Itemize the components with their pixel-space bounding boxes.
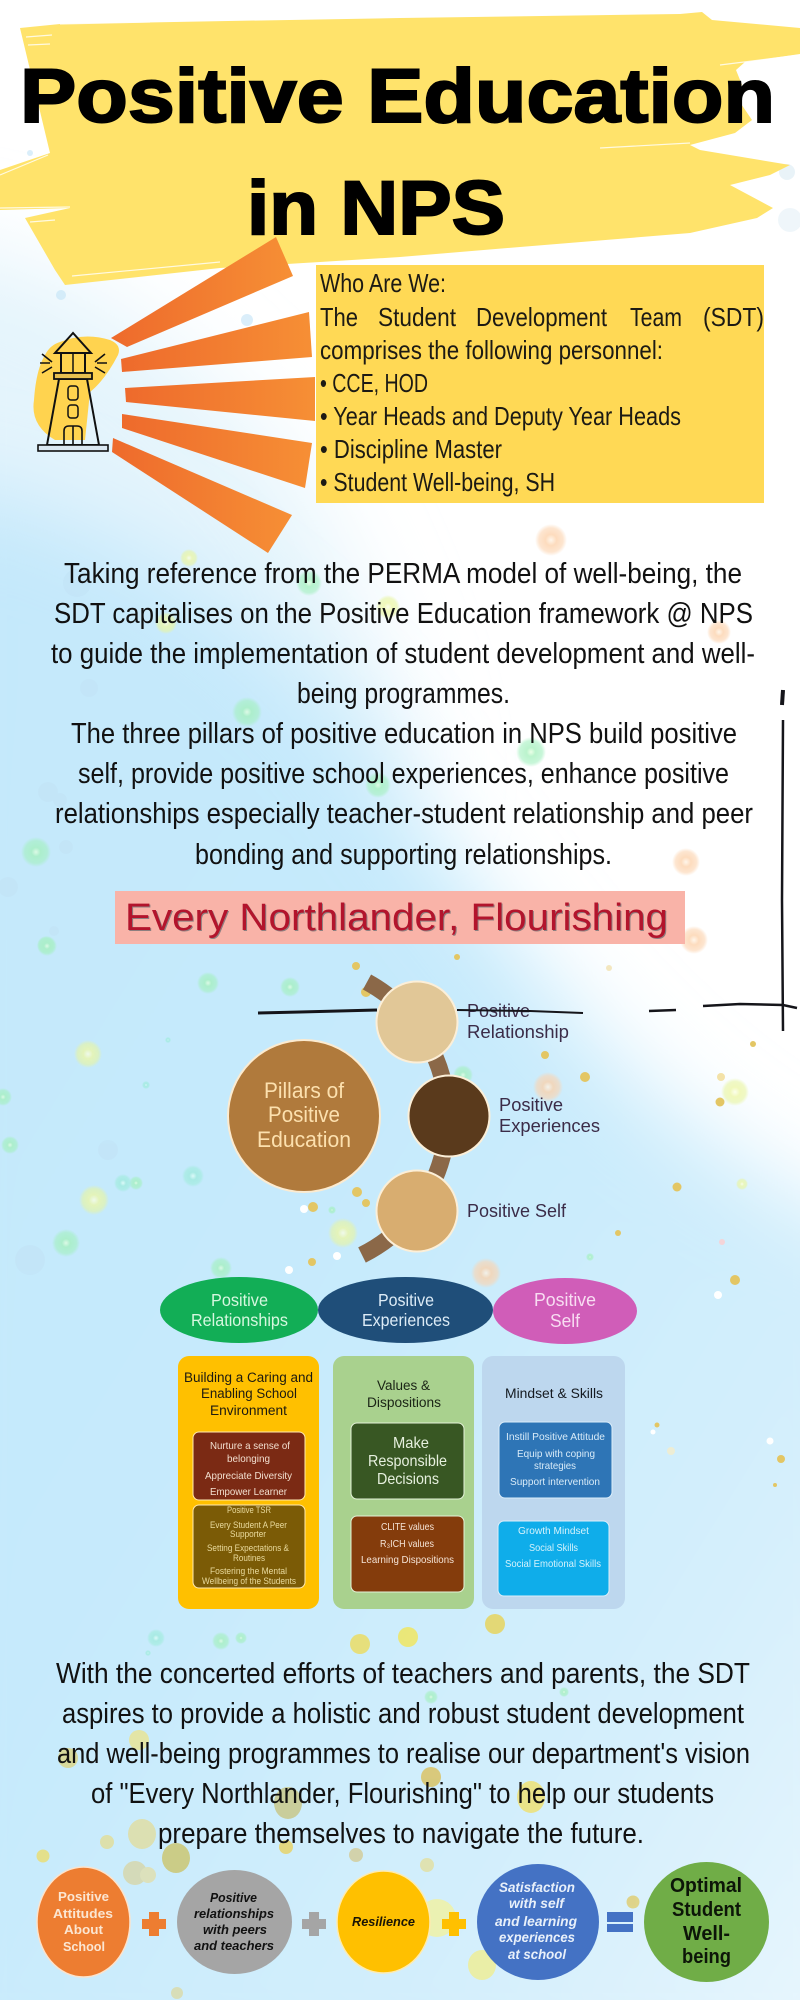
brush lines xyxy=(258,690,797,1031)
box: make responsible decisions: Responsible xyxy=(368,1453,447,1470)
panel: who are we: • Discipline Master xyxy=(320,434,502,464)
panel: who are we: The xyxy=(320,302,358,332)
panel: mindset and skills xyxy=(482,1356,625,1609)
panel: caring and enabling school environment xyxy=(178,1356,319,1609)
circle: optimal well-being: Well- xyxy=(683,1923,730,1945)
panel: values and dispositions: Dispositions xyxy=(367,1395,441,1410)
box: positive TSR: Routines xyxy=(233,1553,265,1563)
title: Positive Education xyxy=(20,54,775,139)
box: skills: Social Emotional Skills xyxy=(505,1558,601,1570)
panel: who are we: • CCE, HOD xyxy=(320,368,428,398)
circle: positive attitudes: Attitudes xyxy=(53,1906,113,1921)
circle: optimal well-being: being xyxy=(682,1946,731,1968)
panel: who are we: Who Are We: xyxy=(320,268,446,298)
header: positive experiences: Positive xyxy=(378,1290,434,1310)
circle: satisfaction: and learning xyxy=(495,1914,578,1929)
equation xyxy=(37,1862,769,1982)
header: positive relationships xyxy=(160,1277,318,1343)
box: make responsible decisions: Decisions xyxy=(377,1471,439,1488)
closing text block: With the concerted efforts of teachers and parents, the SDT xyxy=(56,1658,750,1690)
box: attitude xyxy=(499,1422,612,1498)
box: belonging xyxy=(193,1432,305,1500)
panel: mindset and skills: Mindset & Skills xyxy=(505,1386,603,1401)
circle: satisfaction: Satisfaction xyxy=(499,1880,575,1895)
banner: vision: Every Northlander, Flourishing xyxy=(125,897,668,939)
intro text block: being programmes. xyxy=(297,678,510,710)
panel: who are we: Student xyxy=(378,302,457,332)
pillar: positive self: Positive Self xyxy=(467,1200,567,1221)
box: values: CLITE values xyxy=(381,1521,434,1533)
intro text block xyxy=(51,558,755,871)
box: make responsible decisions xyxy=(351,1423,464,1499)
panel: who are we xyxy=(316,265,764,503)
circle: satisfaction: at school xyxy=(508,1947,566,1962)
yellow brush stroke xyxy=(0,12,800,285)
box: attitude: Instill Positive Attitude xyxy=(506,1431,605,1443)
pillars diagram xyxy=(228,982,600,1255)
box: attitude: strategies xyxy=(534,1460,576,1472)
box: make responsible decisions: Make xyxy=(393,1435,429,1452)
pillar: positive experiences xyxy=(408,1076,600,1156)
box: belonging: Nurture a sense of xyxy=(210,1440,290,1452)
circle: optimal well-being: Optimal xyxy=(670,1875,742,1897)
circle: positive relationships: Positive xyxy=(210,1890,257,1905)
box: values: R₃ICH values xyxy=(380,1538,434,1550)
panel: values and dispositions xyxy=(333,1356,474,1609)
box: positive TSR: Wellbeing of the Students xyxy=(202,1576,296,1586)
circle: resilience xyxy=(337,1871,430,1973)
box: positive TSR: Setting Expectations & xyxy=(207,1543,289,1553)
pillars hub circle: Positive xyxy=(268,1102,340,1127)
box: belonging: Empower Learner xyxy=(210,1486,287,1498)
header: positive self: Self xyxy=(550,1310,581,1331)
pillar: positive experiences: Experiences xyxy=(499,1115,600,1136)
pillar: positive self xyxy=(376,1170,567,1252)
panel: who are we: Team xyxy=(630,302,682,332)
circle: positive relationships: relationships xyxy=(194,1906,274,1921)
icon: lighthouse xyxy=(33,333,119,451)
circle: satisfaction: experiences xyxy=(499,1930,575,1945)
box: positive TSR: Positive TSR xyxy=(227,1505,271,1515)
pillars hub circle xyxy=(228,1040,380,1192)
circle: optimal well-being: Student xyxy=(672,1899,741,1921)
pillars hub circle: Pillars of xyxy=(264,1078,345,1103)
circle: satisfaction: with self xyxy=(509,1896,566,1911)
closing text block xyxy=(56,1658,750,1850)
intro text block: Taking reference from the PERMA model of well-being, the xyxy=(64,558,742,590)
box: skills: Growth Mindset xyxy=(518,1525,589,1537)
panel: who are we: (SDT) xyxy=(703,302,764,332)
title: in NPS xyxy=(247,166,505,251)
panel: who are we: • Year Heads and Deputy Year Heads xyxy=(320,401,681,431)
box: belonging: belonging xyxy=(227,1453,270,1465)
circle: positive attitudes: Positive xyxy=(58,1889,109,1904)
box: belonging: Appreciate Diversity xyxy=(205,1470,293,1482)
title xyxy=(20,54,775,251)
panel: caring and enabling school environment: Enabling School xyxy=(201,1386,297,1401)
intro text block: bonding and supporting relationships. xyxy=(195,839,612,871)
box: positive TSR: Every Student A Peer xyxy=(210,1520,287,1530)
equals sign xyxy=(607,1912,633,1932)
panel: who are we: Development xyxy=(476,302,608,332)
circle: resilience: Resilience xyxy=(352,1914,415,1929)
circle: positive attitudes: School xyxy=(63,1939,105,1954)
header: positive relationships: Positive xyxy=(211,1290,268,1310)
pillar: positive relationship xyxy=(376,982,569,1062)
circle: positive attitudes: About xyxy=(64,1922,104,1937)
circle: optimal well-being xyxy=(644,1862,769,1982)
box: positive TSR: Supporter xyxy=(230,1529,266,1539)
circle: satisfaction xyxy=(477,1864,599,1980)
plus xyxy=(142,1912,166,1936)
circle: positive relationships xyxy=(177,1870,292,1974)
plus xyxy=(442,1912,466,1936)
box: positive TSR xyxy=(193,1505,305,1588)
light rays xyxy=(111,237,315,553)
panel: caring and enabling school environment: Environment xyxy=(210,1403,287,1418)
header: positive experiences: Experiences xyxy=(362,1310,450,1330)
pillars hub circle: Education xyxy=(257,1127,351,1152)
circle: positive relationships: and teachers xyxy=(194,1938,274,1953)
panel: who are we: • Student Well-being, SH xyxy=(320,467,555,497)
circle: positive attitudes xyxy=(37,1867,130,1977)
box: skills: Social Skills xyxy=(529,1542,578,1554)
pillar: positive relationship: Relationship xyxy=(467,1021,569,1042)
box: positive TSR: Fostering the Mental xyxy=(210,1566,287,1576)
panel: who are we: comprises the following personnel: xyxy=(320,335,663,365)
header: positive relationships: Relationships xyxy=(191,1310,288,1330)
pillar: positive experiences: Positive xyxy=(499,1094,563,1115)
box: attitude: Equip with coping xyxy=(517,1448,595,1460)
panel: values and dispositions: Values & xyxy=(377,1378,430,1393)
box: attitude: Support intervention xyxy=(510,1476,600,1488)
plus xyxy=(302,1912,326,1936)
header: positive experiences xyxy=(318,1277,493,1343)
header: positive self: Positive xyxy=(534,1289,596,1310)
box: values xyxy=(351,1516,464,1592)
box: skills xyxy=(498,1521,609,1596)
header: positive self xyxy=(493,1278,637,1344)
circle: positive relationships: with peers xyxy=(203,1922,267,1937)
closing text block: prepare themselves to navigate the future. xyxy=(158,1818,644,1850)
panel: caring and enabling school environment: Building a Caring and xyxy=(184,1370,313,1385)
box: values: Learning Dispositions xyxy=(361,1554,454,1566)
closing text block: of "Every Northlander, Flourishing" to help our students xyxy=(91,1778,714,1810)
pillar: positive relationship: Positive xyxy=(467,1000,530,1021)
